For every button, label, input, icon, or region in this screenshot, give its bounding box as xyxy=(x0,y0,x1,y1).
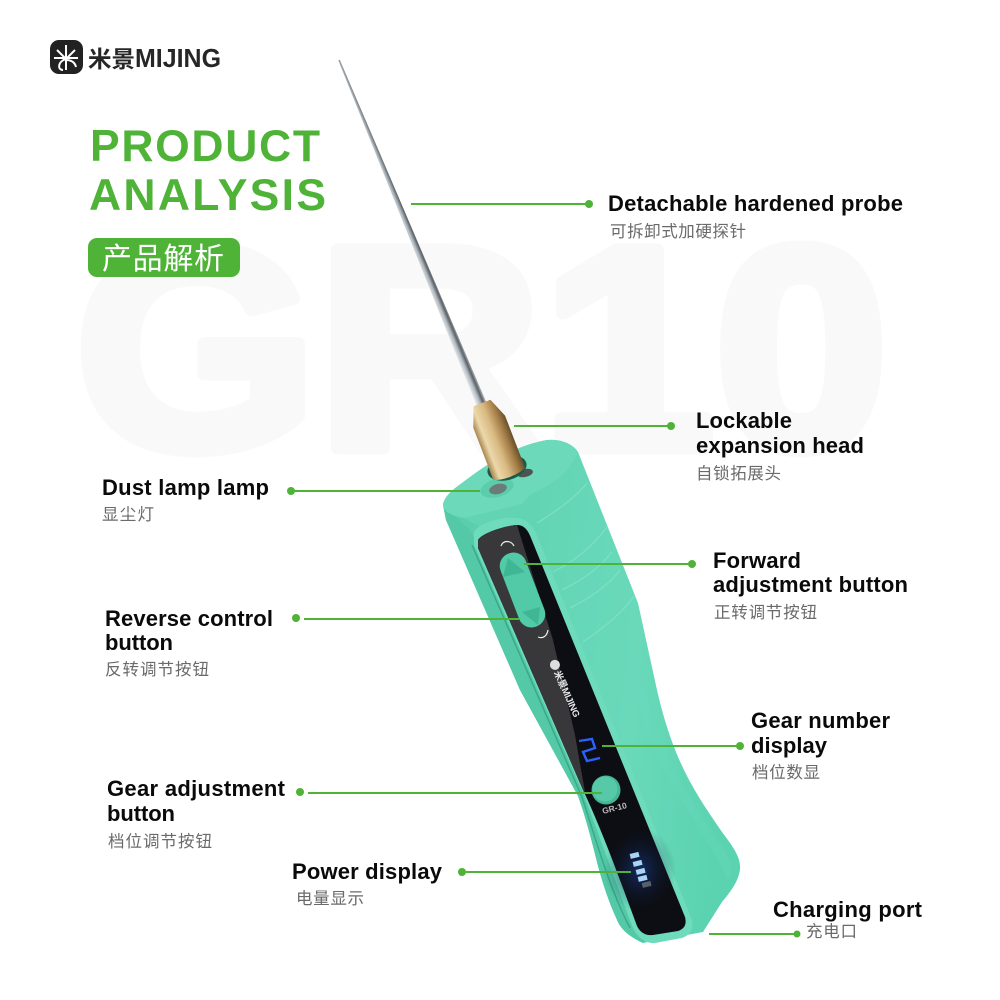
badge: 产品解析 xyxy=(88,238,240,277)
callout: charging port xyxy=(709,897,923,941)
callout: gear button: 档位调节按钮 xyxy=(108,832,212,851)
badge: 产品解析: 产品解析 xyxy=(102,243,224,276)
cap shoulder shade xyxy=(464,495,538,528)
callout: expansion head: 自锁拓展头 xyxy=(696,464,781,483)
callout: forward button: adjustment button xyxy=(713,572,908,597)
logo wordmark: MIJING xyxy=(135,43,221,73)
callout: dust lamp: Dust lamp lamp xyxy=(102,475,269,500)
callout: dust lamp: 显尘灯 xyxy=(102,505,154,524)
callout: expansion head: expansion head xyxy=(696,433,864,458)
callout: dust lamp xyxy=(102,475,480,524)
title xyxy=(89,122,326,220)
expansion head xyxy=(466,397,526,483)
callout: reverse button: button xyxy=(105,630,173,655)
rocker button xyxy=(496,549,549,631)
reverse arrow icon xyxy=(538,630,548,638)
callout: gear button xyxy=(107,776,602,851)
gear digit display xyxy=(579,739,600,761)
callout: gear button: Gear adjustment xyxy=(107,776,286,801)
black panel xyxy=(478,525,686,935)
callout: power display xyxy=(292,859,631,908)
callout: gear button: button xyxy=(107,801,175,826)
logo wordmark: 米景 xyxy=(88,46,135,72)
top cap xyxy=(443,440,578,518)
dust lamp xyxy=(478,475,516,501)
panel brand text: 米景MIJING xyxy=(551,669,582,719)
callout: gear display: Gear number xyxy=(751,708,890,733)
head socket xyxy=(485,451,529,485)
device body xyxy=(443,397,740,943)
panel grey sheen xyxy=(478,525,585,792)
probe xyxy=(334,58,487,408)
panel frame xyxy=(474,518,693,943)
callout: forward button: 正转调节按钮 xyxy=(714,603,817,622)
body shell xyxy=(443,440,740,943)
callout: charging port: Charging port xyxy=(773,897,923,922)
callout: power display: 电量显示 xyxy=(296,889,364,908)
callout: forward button xyxy=(524,548,908,622)
gear button xyxy=(592,776,620,804)
callout: gear display: display xyxy=(751,733,828,758)
callout: reverse button: Reverse control xyxy=(105,606,273,631)
callout: expansion head xyxy=(514,408,864,483)
title: ANALYSIS xyxy=(89,171,326,220)
callout: forward button: Forward xyxy=(713,548,801,573)
panel frame edge line xyxy=(472,545,630,928)
right highlight band xyxy=(636,690,731,880)
callout: reverse button xyxy=(105,606,519,679)
callout: gear display xyxy=(602,708,890,782)
callout: reverse button: 反转调节按钮 xyxy=(105,660,209,679)
power glow xyxy=(604,828,676,912)
callout: gear display: 档位数显 xyxy=(752,763,820,782)
callout: detachable probe xyxy=(411,191,903,241)
forward arrow icon xyxy=(501,542,514,546)
model label: GR-10 xyxy=(601,800,628,816)
panel brand text xyxy=(547,658,582,719)
small sensor xyxy=(516,467,534,479)
callout: power display: Power display xyxy=(292,859,443,884)
callout: detachable probe: 可拆卸式加硬探针 xyxy=(610,222,746,241)
battery bars xyxy=(630,852,652,888)
grip ridges xyxy=(537,483,635,642)
callout: detachable probe: Detachable hardened probe xyxy=(608,191,903,216)
left shaded edge xyxy=(443,505,650,943)
logo wordmark xyxy=(88,43,221,73)
watermark: GR10: GR10 xyxy=(75,188,888,510)
icon: logo mark xyxy=(50,40,83,74)
callout: expansion head: Lockable xyxy=(696,408,792,433)
logo: MIJING xyxy=(50,40,221,74)
title: PRODUCT xyxy=(90,122,320,171)
callout: charging port: 充电口 xyxy=(806,922,857,941)
